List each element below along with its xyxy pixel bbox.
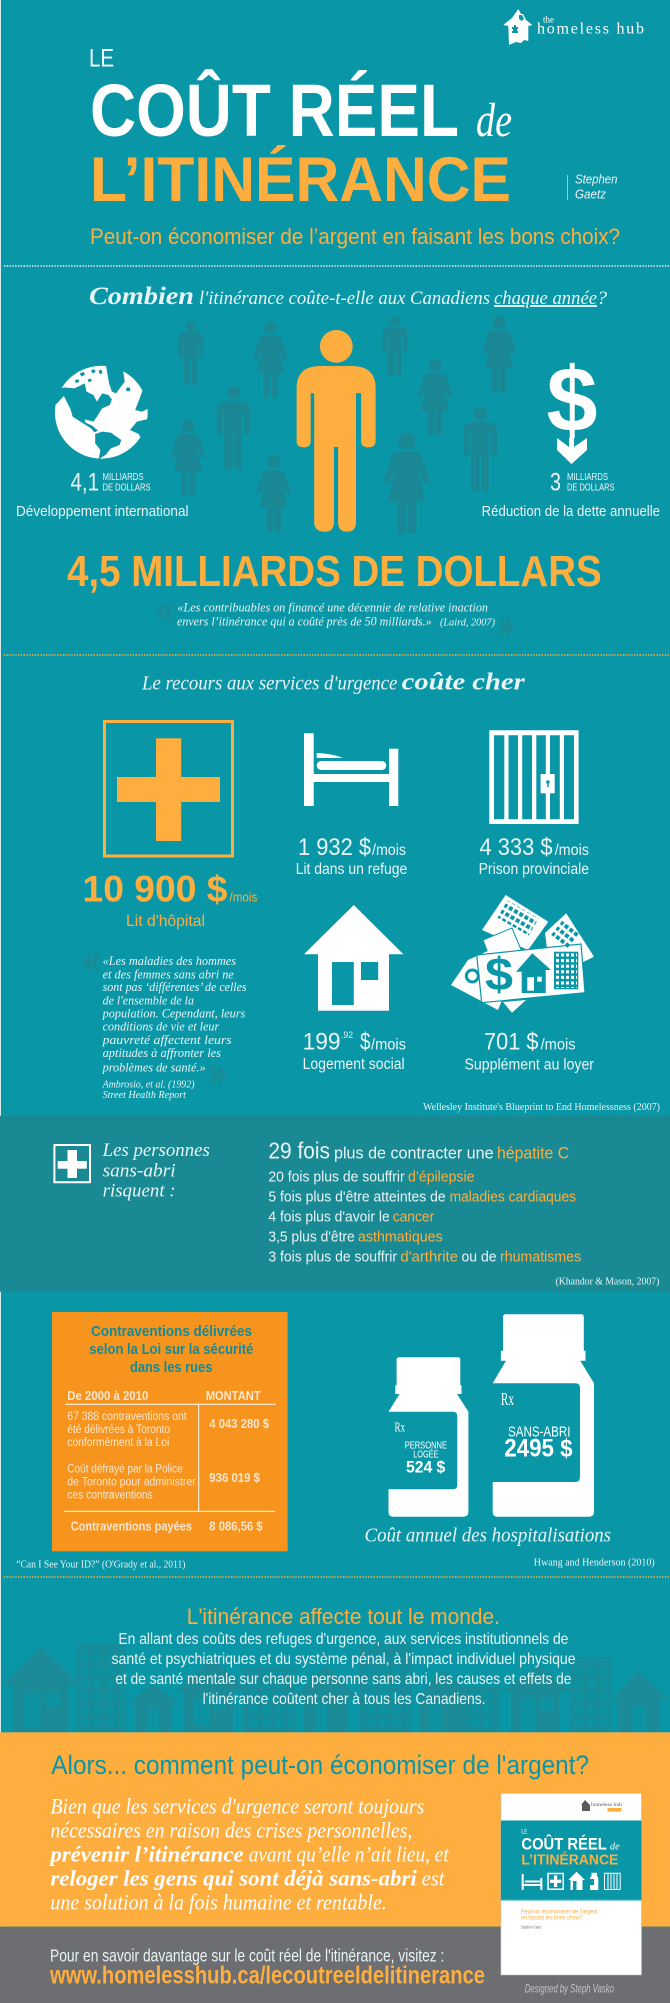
bottle caption: Coût annuel des hospitalisations: [364, 1525, 611, 1547]
text: everyone is affected: santé et psychiatriques et du système pénal, à l'impact individuel physique: [112, 1651, 576, 1668]
quote: inaction: «: [156, 583, 174, 632]
text: everyone is affected: L'itinérance affecte tout le monde.: [187, 1604, 500, 1629]
stat: shelter: Lit dans un refuge: [296, 861, 407, 878]
risk list: 3,5 plus d'être: [268, 1228, 355, 1245]
icon: house: [304, 905, 403, 1011]
icon: small bottle: PERSONNE: [405, 1440, 447, 1451]
author: [567, 171, 618, 202]
title: L’ITINÉRANCE: [90, 145, 511, 215]
panel: tickets table: 4 043 280 $: [209, 1417, 269, 1431]
heading: services d'urgence: Le recours aux services d'urgence: [141, 672, 398, 694]
cover icons: [522, 1872, 621, 1890]
panel: tickets table: 8 086,56 $: [209, 1520, 263, 1534]
quote: inaction: [156, 583, 515, 647]
paragraph: solution: Bien que les services d'urgence seront toujours: [50, 1793, 424, 1818]
risk list: hépatite C: [497, 1143, 569, 1162]
source: Hwang: Hwang and Henderson (2010): [534, 1557, 655, 1569]
heading: services d'urgence: [141, 669, 525, 695]
big number: 4,5 MILLIARDS DE DOLLARS: [67, 547, 602, 596]
stat: shelter: /mois: [372, 842, 406, 859]
quote: health: Ambrosio, et al. (1992): [102, 1079, 195, 1090]
author: Gaetz: [575, 187, 606, 202]
icon: plus box: [53, 1144, 91, 1183]
quote: inaction: envers l’itinérance qui a coûté près de 50 milliards.»: [177, 615, 432, 629]
stat: social housing: 199: [303, 1028, 341, 1055]
icon: banknotes and rent supplement: [451, 895, 594, 1013]
panel: tickets table: [52, 1312, 288, 1551]
stat: debt: MILLIARDS: [567, 472, 608, 483]
quote: health: «Les maladies des hommes: [103, 953, 236, 968]
heading: combien: chaque année: [494, 288, 597, 309]
title: LE: [89, 45, 114, 73]
quote: health: population. Cependant, leurs: [102, 1006, 245, 1021]
text: everyone is affected: [112, 1604, 576, 1708]
stat: social housing: .92: [341, 1030, 353, 1040]
icon: large bottle: Rx: [501, 1389, 514, 1409]
cover teal block: COÛT RÉEL: [521, 1834, 607, 1853]
panel: tickets table: de Toronto pour administrer: [67, 1476, 196, 1488]
quote: health: de l'ensemble de la: [103, 992, 194, 1007]
quote: health: sont pas ‘différentes’ de celles: [103, 979, 247, 994]
cover teal block: [501, 1820, 642, 1901]
quote: health: [82, 933, 247, 1101]
logo: the homeless hub: [503, 9, 644, 45]
panel: tickets table: été délivrées à Toronto: [67, 1424, 170, 1436]
risk list: 3 fois plus de souffrir: [268, 1248, 397, 1265]
logo: the homeless hub: homeless hub: [537, 20, 644, 37]
quote: health: »: [209, 1046, 227, 1095]
stat: prison: /mois: [555, 842, 589, 859]
risk list: 20 fois plus de souffrir: [268, 1168, 405, 1185]
icon: banknotes and rent supplement: $: [485, 948, 513, 1000]
title: COÛT RÉEL: [90, 69, 459, 152]
paragraph: solution: nécessaires en raison des crises personnelles,: [50, 1817, 412, 1842]
subtitle: Peut-on économiser de l’argent en faisant les bons choix?: [90, 224, 620, 249]
cover teal block: L’ITINÉRANCE: [521, 1852, 618, 1869]
icon: prison bars: [489, 730, 579, 824]
stat: development: [16, 469, 188, 520]
icon: large bottle: SANS-ABRI: [508, 1423, 570, 1440]
risk list: rhumatismes: [500, 1248, 581, 1265]
title: de: [476, 94, 512, 147]
stat: shelter: 1 932 $: [298, 834, 371, 861]
report cover: [501, 1793, 642, 1975]
paragraph: solution: est: [422, 1865, 445, 1890]
stat: development: MILLIARDS: [102, 472, 144, 483]
stat: rent supplement: [464, 1029, 594, 1074]
icon: globe: [53, 363, 153, 459]
panel: health risks: [0, 1116, 670, 1292]
stat: debt: 3: [550, 469, 561, 497]
panel: footer: [0, 1927, 670, 2003]
paragraph: solution: reloger les gens qui sont déjà sans-abri: [50, 1865, 418, 1890]
risk list: d'arthrite: [400, 1248, 458, 1265]
cover subtitle: Peut-on économiser de l'argent: [521, 1908, 598, 1915]
panel: tickets table: 936 019 $: [209, 1471, 260, 1485]
panel: footer: Designed by Steph Vasko: [525, 1982, 614, 1996]
stat: social housing: /mois: [371, 1036, 406, 1053]
risk heading: [102, 1140, 210, 1202]
heading: combien: Combien: [89, 283, 194, 310]
risk list: maladies cardiaques: [450, 1188, 576, 1205]
table title: selon la Loi sur la sécurité: [89, 1341, 253, 1358]
quote: health: «: [82, 933, 100, 982]
stat: social housing: [303, 1028, 406, 1073]
author: Stephen: [575, 171, 618, 186]
table title: Contraventions délivrées: [91, 1323, 252, 1340]
quote: health: et des femmes sans abri ne: [103, 966, 234, 981]
risk list: 4 fois plus d'avoir le: [268, 1208, 390, 1225]
quote: health: conditions de vie et leur: [103, 1019, 220, 1034]
cover logo: [581, 1800, 623, 1812]
stat: hospital bed: 10 900 $: [82, 869, 228, 910]
icon: large bottle: 2495 $: [504, 1435, 573, 1463]
icon: small bottle: Rx: [394, 1421, 405, 1436]
quote: inaction: «Les contribuables on financé une décennie de relative inaction: [177, 601, 488, 615]
panel: tickets table: MONTANT: [206, 1389, 261, 1403]
risk list: d’épilepsie: [408, 1168, 474, 1185]
stat: debt: DE DOLLARS: [567, 483, 615, 494]
cover subtitle: [521, 1908, 598, 1930]
source: Khandor: (Khandor & Mason, 2007): [556, 1276, 660, 1288]
risk list: 5 fois plus d'être atteintes de: [268, 1188, 446, 1205]
panel: tickets table: 67 388 contraventions ont: [67, 1411, 187, 1423]
stat: development: Développement international: [16, 503, 188, 520]
text: everyone is affected: et de santé mentale sur chaque personne sans abri, les causes et effets de: [115, 1671, 571, 1688]
table title: [89, 1323, 253, 1376]
quote: inaction: (Laird, 2007): [440, 618, 496, 629]
panel: tickets table: De 2000 à 2010: [67, 1389, 148, 1403]
text: everyone is affected: En allant des coûts des refuges d'urgence, aux services institutionnels de: [118, 1631, 568, 1648]
paragraph: solution: avant qu’elle n’ait lieu, et: [249, 1841, 449, 1866]
stat: prison: [479, 834, 589, 878]
stat: rent supplement: /mois: [541, 1037, 576, 1054]
panel: footer: Pour en savoir davantage sur le coût réel de l'itinérance, visitez :: [50, 1946, 444, 1966]
title: [89, 45, 512, 215]
risk list: cancer: [393, 1208, 434, 1225]
icon: shelter bed: [304, 733, 398, 806]
logo: the homeless hub: the: [543, 15, 554, 25]
cover teal block: de: [610, 1841, 620, 1852]
panel: how to save money: [0, 1732, 670, 1927]
stat: shelter: [296, 834, 407, 878]
heading: combien: [89, 283, 608, 310]
heading: services d'urgence: coûte cher: [402, 669, 525, 695]
risk heading: Les personnes: [102, 1140, 210, 1161]
background people: [171, 316, 516, 534]
paragraph: solution: [48, 1793, 449, 1914]
skyline background: [2, 1642, 669, 1733]
stat: prison: 4 333 $: [480, 834, 552, 861]
risk list: asthmatiques: [358, 1228, 443, 1245]
quote: inaction: »: [498, 598, 515, 647]
source: O'Grady: “Can I See Your ID?” (O'Grady et al., 2011): [16, 1558, 186, 1570]
stat: development: 4,1: [70, 469, 99, 497]
icon: small bottle: LOGÉE: [413, 1447, 439, 1460]
stat: social housing: $: [360, 1028, 370, 1055]
risk list: [268, 1137, 581, 1265]
panel: tickets table: ces contraventions: [67, 1489, 153, 1501]
risk heading: sans-abri: [103, 1160, 176, 1181]
stat: debt: [482, 469, 660, 520]
stat: hospital bed: /mois: [230, 890, 258, 905]
text: everyone is affected: l'itinérance coûtent cher à tous les Canadiens.: [203, 1691, 486, 1708]
stat: hospital bed: Lit d'hôpital: [126, 913, 205, 930]
heading: alors: Alors... comment peut-on économiser de l'argent?: [51, 1750, 589, 1780]
icon: dollar with down arrow: $: [546, 349, 598, 451]
risk list: ou de: [462, 1248, 497, 1265]
heading: combien: l'itinérance coûte-t-elle aux Canadiens: [199, 288, 490, 309]
stat: rent supplement: Supplément au loyer: [464, 1057, 594, 1074]
risk list: plus de contracter une: [334, 1143, 494, 1162]
stat: social housing: Logement social: [303, 1056, 405, 1073]
cover subtitle: Stephen Gaetz: [521, 1925, 542, 1930]
big orange person: [297, 330, 376, 532]
icon: small bottle: [388, 1357, 468, 1517]
paragraph: solution: prévenir l’itinérance: [48, 1841, 244, 1866]
stat: development: DE DOLLARS: [102, 483, 151, 494]
stat: prison: Prison provinciale: [479, 861, 589, 878]
quote: health: aptitudes à affronter les: [103, 1045, 221, 1060]
cover subtitle: en faisant les bons choix?: [521, 1914, 583, 1922]
icon: hospital cross: [104, 722, 232, 856]
risk heading: risquent :: [103, 1181, 176, 1202]
cover logo: homeless hub: [591, 1803, 623, 1808]
icon: small bottle: 524 $: [406, 1458, 446, 1477]
stat: hospital bed: [82, 869, 258, 930]
table title: dans les rues: [130, 1359, 212, 1376]
quote: health: problèmes de santé.»: [102, 1060, 206, 1075]
risk list: 29 fois: [268, 1137, 330, 1163]
paragraph: solution: une solution à la fois humaine et rentable.: [50, 1889, 387, 1914]
stat: rent supplement: 701 $: [484, 1029, 538, 1056]
heading: combien: ?: [597, 288, 608, 309]
quote: health: pauvreté affectent leurs: [102, 1032, 232, 1047]
panel: tickets table: Contraventions payées: [71, 1520, 192, 1534]
quote: health: Street Health Report: [103, 1090, 187, 1101]
panel: tickets table: conformément à la Loi: [67, 1437, 169, 1449]
panel: tickets table: Coût défrayé par la Police: [67, 1463, 183, 1475]
panel: footer: www.homelesshub.ca/lecoutreeldelitinerance: [49, 1961, 485, 1989]
icon: large bottle: [492, 1314, 594, 1517]
cover teal block: LE: [521, 1829, 527, 1835]
